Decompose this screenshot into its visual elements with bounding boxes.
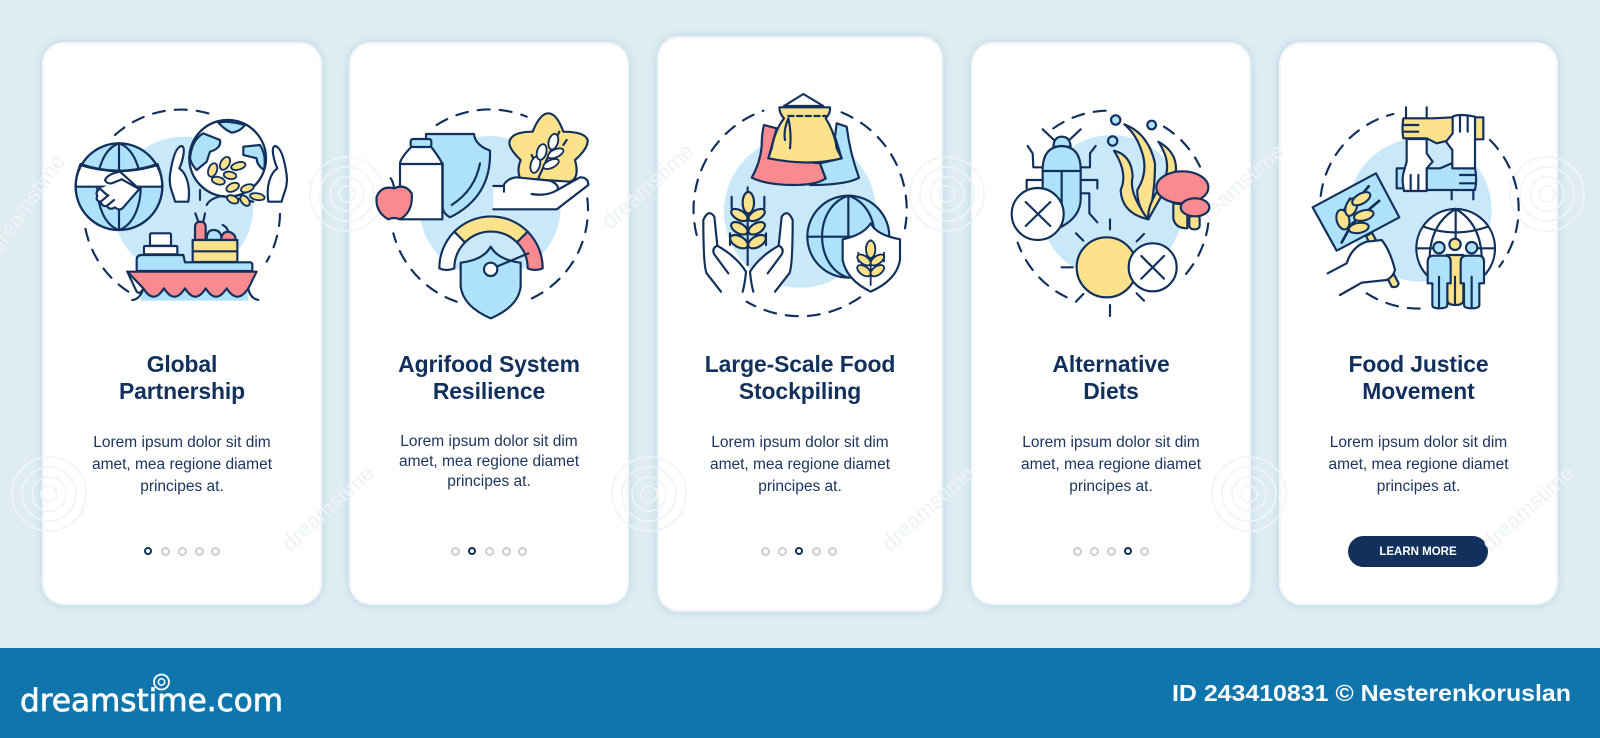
icon: global partnership <box>74 108 288 302</box>
icon: agrifood resilience <box>375 108 590 320</box>
icon: alternative diets <box>1010 110 1210 318</box>
title: Global Partnership: Partnership <box>119 378 245 404</box>
title: Global Partnership <box>119 350 245 404</box>
title: Large-Scale Food Stockpiling <box>705 350 895 404</box>
text block: amet, mea regione diamet <box>710 456 890 473</box>
text block <box>710 434 890 495</box>
title: Large-Scale Food Stockpiling: Large-Scale Food <box>705 350 895 376</box>
button: learn more: LEARN MORE <box>1379 546 1457 558</box>
pagination dots <box>451 547 527 556</box>
panel: Large-Scale Food Stockpiling <box>659 38 941 610</box>
title: Global Partnership: Global <box>147 350 217 376</box>
text block: Lorem ipsum dolor sit dim <box>711 434 889 451</box>
image id and credit: ID 243410831 © Nesterenkoruslan <box>1172 680 1571 706</box>
text block: amet, mea regione diamet <box>1328 456 1509 473</box>
text block: principes at. <box>140 478 224 495</box>
text block: Lorem ipsum dolor sit dim <box>93 434 271 451</box>
watermark: dreamstime <box>877 460 979 556</box>
text block: principes at. <box>1377 478 1460 495</box>
watermark: dreamstime <box>277 460 379 556</box>
title: Alternative Diets: Diets <box>1083 378 1139 404</box>
watermark: dreamstime <box>1187 138 1289 234</box>
panel: Global Partnership <box>44 44 320 603</box>
watermark: dreamstime <box>1477 460 1579 556</box>
title: Agrifood System Resilience <box>398 350 580 404</box>
text block <box>399 433 579 490</box>
pagination dots <box>144 547 220 556</box>
title: Alternative Diets: Alternative <box>1052 350 1170 376</box>
text block: Lorem ipsum dolor sit dim <box>1022 434 1200 451</box>
panel: Alternative Diets <box>973 44 1249 603</box>
text block: amet, mea regione diamet <box>92 456 272 473</box>
text block: amet, mea regione diamet <box>1021 456 1201 473</box>
logo: dreamstime: dreamstime.com <box>20 683 283 719</box>
text block: principes at. <box>758 478 842 495</box>
watermark: dreamstime <box>597 138 699 234</box>
text block <box>92 434 272 495</box>
text block <box>1328 434 1509 495</box>
title: Food Justice Movement: Movement <box>1362 378 1475 404</box>
text block <box>1021 434 1201 495</box>
text block: principes at. <box>447 473 531 490</box>
panel: Food Justice Movement <box>1281 44 1556 603</box>
title: Agrifood System Resilience: Resilience <box>433 378 545 404</box>
text block: principes at. <box>1069 478 1153 495</box>
title: Agrifood System Resilience: Agrifood System <box>398 350 580 376</box>
title: Food Justice Movement <box>1348 350 1488 404</box>
text block: Lorem ipsum dolor sit dim <box>400 433 578 450</box>
pagination dots <box>1073 547 1149 556</box>
text block: Lorem ipsum dolor sit dim <box>1330 434 1507 451</box>
title: Food Justice Movement: Food Justice <box>1348 350 1488 376</box>
title: Alternative Diets <box>1052 350 1170 404</box>
panel: Agrifood System Resilience <box>351 44 627 603</box>
footer bar <box>0 648 1600 738</box>
pagination dots <box>761 547 837 556</box>
button: learn more <box>1348 536 1488 567</box>
text block: amet, mea regione diamet <box>399 453 579 470</box>
icon: food justice movement <box>1312 106 1520 310</box>
icon: food stockpiling <box>692 92 908 318</box>
title: Large-Scale Food Stockpiling: Stockpiling <box>739 378 861 404</box>
